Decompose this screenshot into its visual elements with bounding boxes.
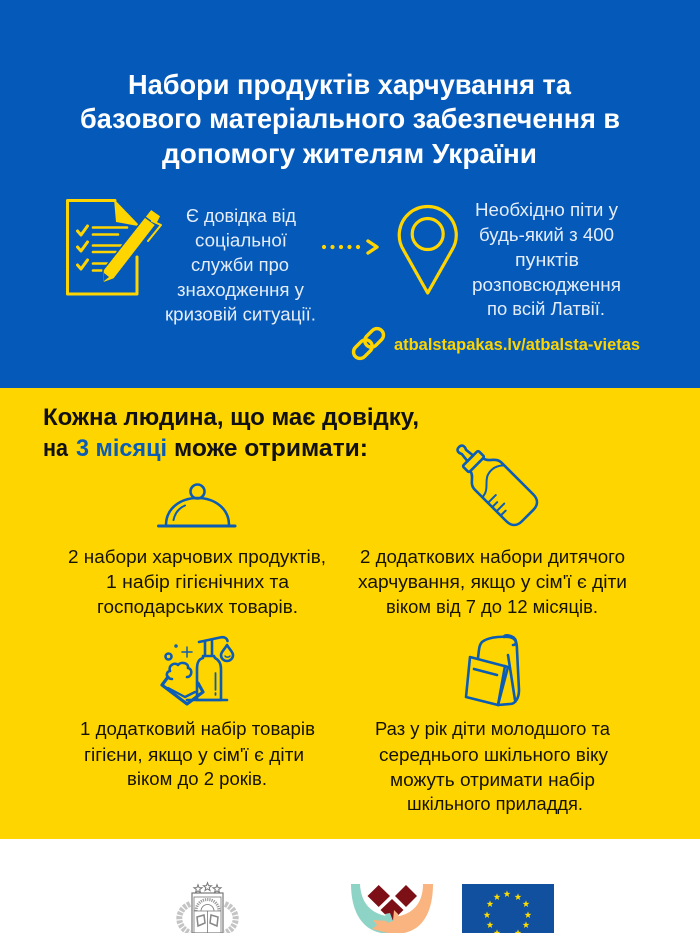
- heading: 3 місяці: [76, 435, 167, 462]
- text: food sets: господарських товарів.: [97, 597, 298, 617]
- text: school supplies: шкільного приладдя.: [407, 794, 583, 814]
- heading: [43, 404, 419, 462]
- text: distribution points: пунктів: [515, 250, 579, 270]
- text: distribution points: по всій Латвії.: [487, 299, 605, 319]
- link text: atbalstapakas.lv/atbalsta-vietas: [394, 336, 640, 354]
- text: school supplies: Раз у рік діти молодшого та: [375, 719, 611, 739]
- text: certificate requirement: соціальної: [195, 230, 287, 250]
- icon: baby bottle: [446, 434, 541, 529]
- text: distribution points: розповсюдження: [472, 275, 621, 295]
- text: school supplies: середнього шкільного віку: [379, 745, 608, 765]
- text: certificate requirement: [165, 206, 316, 324]
- text: distribution points: будь-який з 400: [479, 225, 614, 245]
- logo: Latvian coat of arms: [179, 883, 236, 933]
- icon: document with pencil: [68, 199, 161, 294]
- title: базового матеріального забезпечення в: [80, 103, 620, 134]
- panel: yellow benefits: [0, 388, 700, 839]
- panel: white footer: [0, 839, 700, 933]
- text: hygiene set: гігієни, якщо у сім'ї є діти: [84, 745, 304, 765]
- text: certificate requirement: кризовій ситуації.: [165, 304, 316, 324]
- text: hygiene set: віком до 2 років.: [127, 769, 267, 789]
- text: school supplies: [375, 719, 611, 814]
- heading: Кожна людина, що має довідку,: [43, 404, 419, 431]
- icon: food cloche: [158, 484, 235, 526]
- title: допомогу жителям України: [162, 138, 537, 169]
- text: food sets: [68, 547, 326, 617]
- text: school supplies: можуть отримати набір: [390, 770, 595, 790]
- icon: chain link: [351, 326, 386, 361]
- text: baby food sets: харчування, якщо у сім'ї є діти: [358, 572, 627, 592]
- text: food sets: 1 набір гігієнічних та: [106, 572, 290, 592]
- heading: на: [43, 435, 69, 462]
- panel: blue header: [0, 0, 700, 388]
- text: certificate requirement: знаходження у: [177, 280, 304, 300]
- text: hygiene set: [80, 719, 315, 789]
- text: baby food sets: [358, 547, 627, 617]
- title: Набори продуктів харчування та: [128, 69, 572, 100]
- icon: soap and dispenser: [162, 637, 233, 704]
- icon: backpack: [466, 635, 519, 705]
- title: [80, 69, 620, 169]
- text: distribution points: [472, 200, 621, 319]
- icon: map pin: [399, 207, 456, 293]
- logo: EU flag: [462, 884, 554, 933]
- text: certificate requirement: служби про: [191, 255, 289, 275]
- text: food sets: 2 набори харчових продуктів,: [68, 547, 326, 567]
- text: certificate requirement: Є довідка від: [186, 206, 296, 226]
- text: distribution points: Необхідно піти у: [475, 200, 618, 220]
- text: baby food sets: 2 додаткових набори дитячого: [360, 547, 625, 567]
- arrow: dotted: [322, 241, 377, 253]
- logo: hands with diamonds: [351, 884, 433, 933]
- text: hygiene set: 1 додатковий набір товарів: [80, 719, 315, 739]
- text: baby food sets: віком від 7 до 12 місяців.: [386, 597, 598, 617]
- heading: може отримати:: [174, 435, 368, 462]
